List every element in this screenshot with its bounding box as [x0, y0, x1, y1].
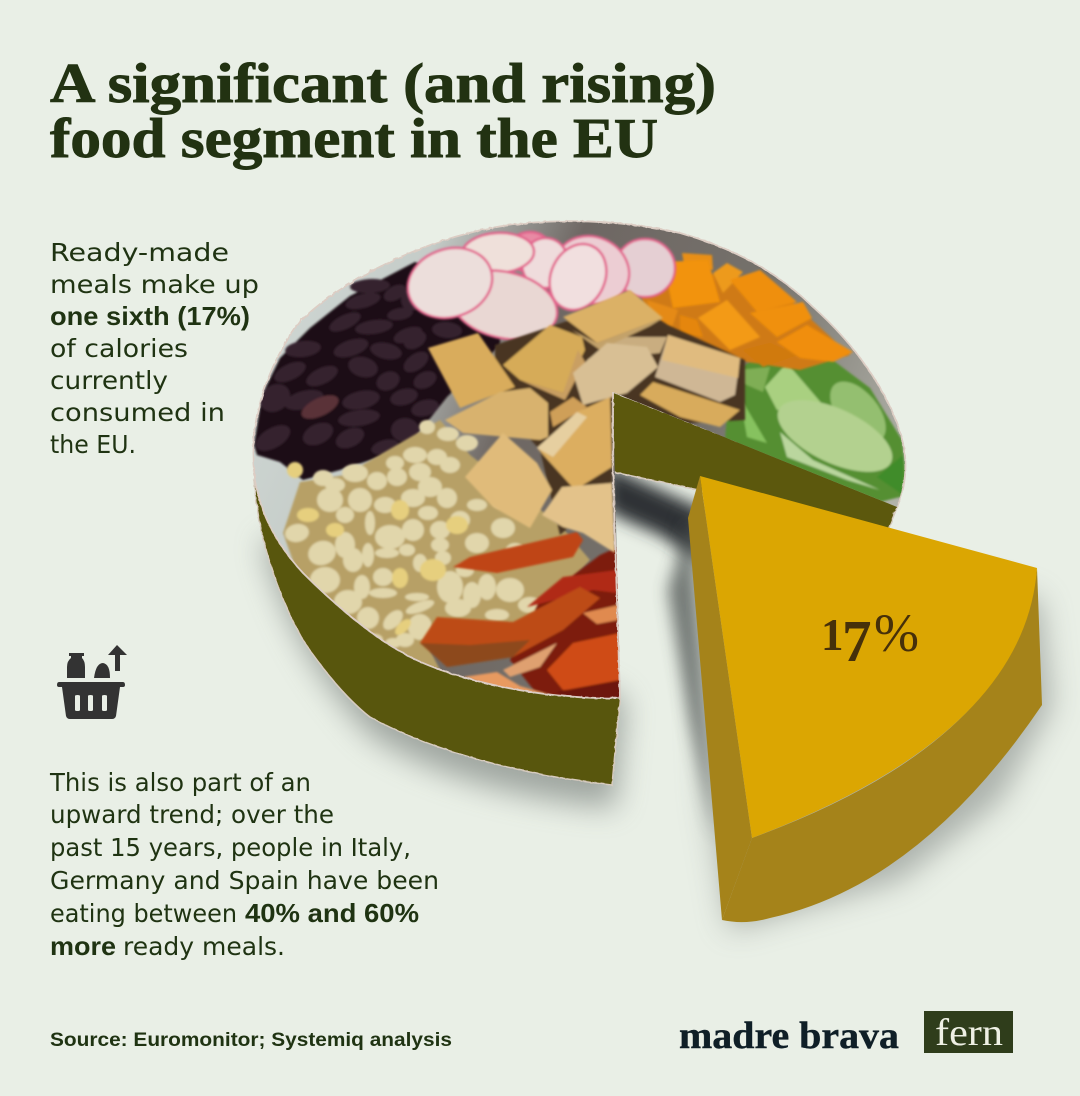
text block: upward trend: more — [50, 931, 116, 961]
bowl interior — [245, 215, 910, 705]
food: tofu cubes — [428, 290, 745, 553]
title — [50, 53, 716, 170]
wedge gap shading: top — [606, 465, 704, 565]
text block: one sixth of calories — [50, 238, 259, 459]
text block: one sixth of calories: consumed in — [50, 398, 225, 427]
logo: fern: fern — [935, 1012, 1003, 1054]
text block: upward trend: past 15 years, people in Italy, — [50, 833, 411, 862]
food: cucumber — [725, 355, 908, 502]
text block: one sixth of calories: currently — [50, 366, 168, 395]
source line: Source: Euromonitor; Systemiq analysis — [50, 1030, 452, 1051]
slice label: 1 — [821, 610, 844, 660]
soft shadow under bowl wall — [262, 540, 625, 808]
text block: one sixth of calories: meals make up — [50, 270, 259, 299]
food: lentils — [282, 418, 590, 669]
text block: one sixth of calories: the EU. — [50, 430, 136, 459]
food: red peppers — [420, 532, 622, 700]
text block: upward trend: eating between — [50, 899, 237, 928]
cut inner wall: olive — [613, 392, 898, 530]
text block: upward trend: upward trend; over the — [50, 800, 334, 829]
icon: shopping basket with rising arrow — [57, 645, 127, 719]
food: radish slices — [405, 230, 678, 341]
slice outer wall — [722, 568, 1042, 922]
text block: one sixth of calories: one sixth (17%) — [50, 301, 250, 331]
text block: upward trend — [49, 768, 439, 961]
bowl side wall: olive band — [254, 480, 620, 785]
text block: one sixth of calories: Ready-made — [50, 238, 229, 267]
text block: upward trend: Germany and Spain have been — [50, 866, 439, 895]
food: black beans — [252, 262, 500, 480]
text block: one sixth of calories: of calories — [50, 334, 188, 363]
title: A significant (and rising) — [50, 53, 716, 115]
slice left wall — [688, 476, 752, 920]
slice: 17% wedge — [688, 476, 1042, 922]
bowl rim edge — [253, 221, 905, 698]
text block: upward trend: This is also part of an — [49, 768, 311, 797]
slice label: 7 — [842, 608, 872, 674]
bowl top: food photo illustration — [245, 215, 910, 705]
pie chart: ready-made meals share — [245, 215, 1052, 930]
title: food segment in the EU — [50, 108, 658, 170]
logo: madre brava: madre brava — [679, 1015, 899, 1057]
text block: upward trend: 40% and 60% — [245, 898, 419, 928]
logo: fern — [924, 1011, 1013, 1054]
wedge gap shading: along slice — [668, 520, 716, 840]
slice shadow — [695, 520, 1052, 930]
text block: upward trend: ready meals. — [123, 932, 285, 961]
slice top — [700, 476, 1037, 838]
slice label: % — [874, 603, 919, 663]
food: squash cubes — [640, 253, 853, 370]
